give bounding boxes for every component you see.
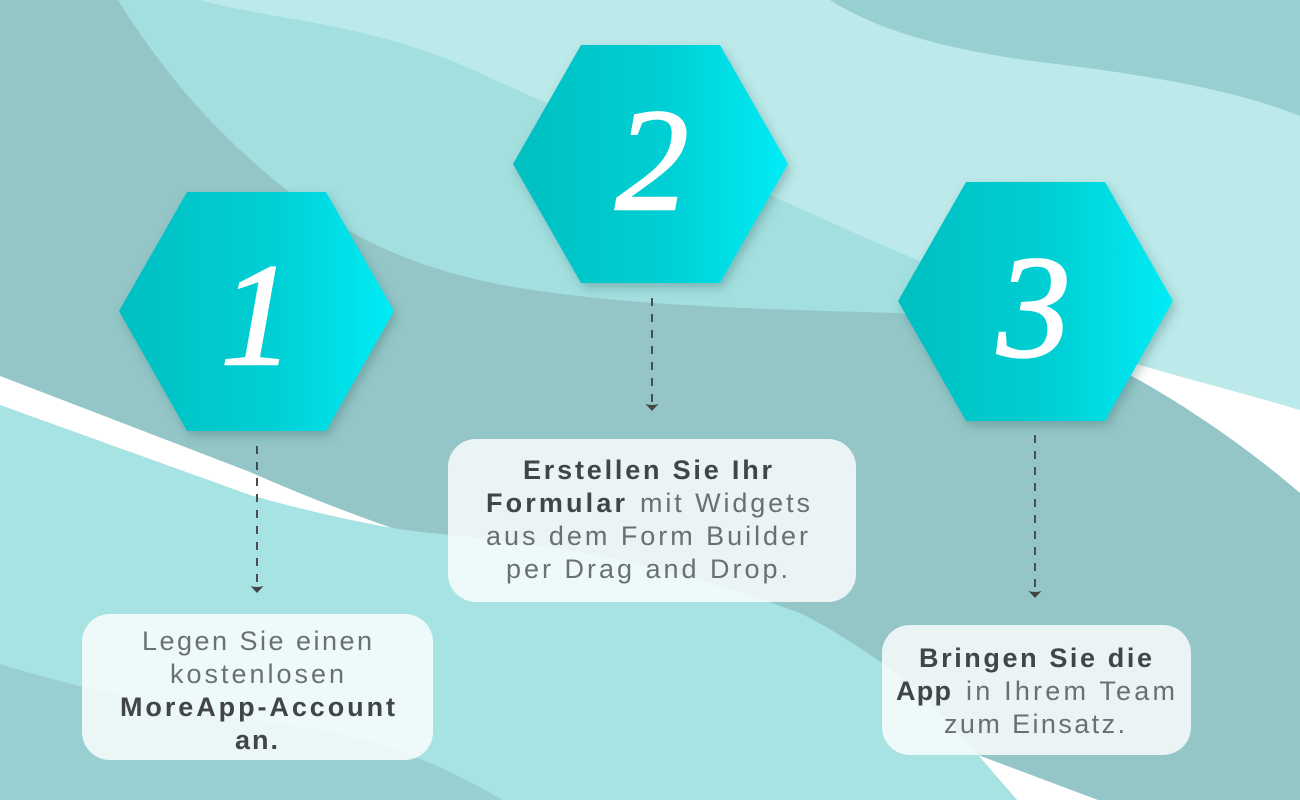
step 2: hexagon with number: 2	[616, 79, 688, 241]
step 3: text card: App	[896, 676, 951, 706]
step 3: connector arrow	[1028, 435, 1042, 598]
step 1: text card: Legen Sie einen	[142, 626, 372, 656]
step 3: text card	[882, 625, 1191, 755]
step 3: text card: Bringen Sie die	[919, 643, 1152, 673]
step 2: connector arrow	[646, 298, 658, 411]
step 3: text card: zum Einsatz.	[944, 709, 1125, 739]
step 2: text card	[448, 439, 856, 602]
background: top-right dark wave	[830, 0, 1300, 116]
step 1: hexagon with number: 1	[220, 234, 294, 396]
background: white ribbon right	[1130, 362, 1300, 493]
step 2: text card: mit Widgets	[640, 488, 810, 518]
step 2: text card: Erstellen Sie Ihr	[523, 455, 772, 485]
background: mid wave	[118, 0, 930, 314]
step 2: text card: per Drag and Drop.	[506, 554, 788, 584]
step 3: hexagon with number: 3	[996, 226, 1070, 388]
background: lower light wave	[0, 405, 1017, 800]
step 1: text card: kostenlosen	[170, 659, 344, 689]
background: lightest wave	[118, 0, 1300, 410]
step 1: text card	[82, 614, 433, 760]
background: white ribbon left	[0, 376, 392, 528]
background: bottom-left dark wave	[0, 664, 503, 800]
step 1: connector arrow	[250, 446, 264, 593]
step 3: hexagon with number	[898, 182, 1173, 421]
step 3: text card: in Ihrem Team	[966, 676, 1175, 706]
step 1: text card: MoreApp-Account	[120, 692, 395, 722]
step 2: text card: Formular	[486, 488, 625, 518]
step 2: hexagon with number	[513, 45, 788, 283]
background: white ribbon bottom	[978, 755, 1098, 800]
step 2: text card: aus dem Form Builder	[486, 521, 808, 551]
step 1: hexagon with number	[119, 192, 394, 431]
step 1: text card: an.	[235, 725, 278, 755]
